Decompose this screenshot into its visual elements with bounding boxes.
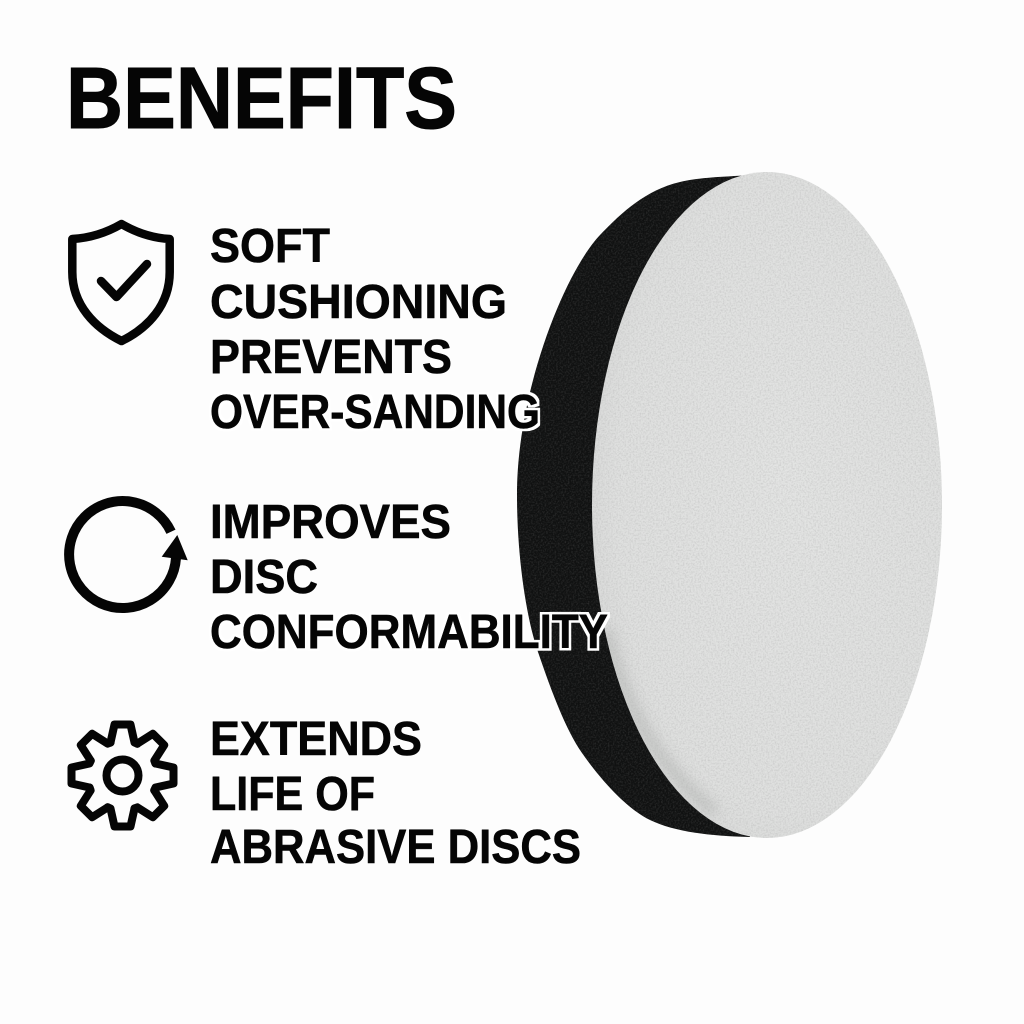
text block: benefit three: EXTENDS bbox=[210, 713, 422, 766]
text block: benefit one: SOFT bbox=[210, 220, 330, 273]
pad black foam side bbox=[517, 176, 800, 837]
text block: benefit one: OVER-SANDING bbox=[210, 386, 540, 439]
text block: benefit two: IMPROVES bbox=[210, 496, 451, 549]
text block: benefit three: LIFE OF bbox=[210, 768, 375, 821]
text block: benefit one: CUSHIONING bbox=[210, 276, 507, 329]
text block: benefit two: DISC bbox=[210, 551, 318, 604]
title: BENEFITS bbox=[66, 50, 457, 147]
icon: shield with check bbox=[72, 224, 170, 341]
icon: circular arrow bbox=[69, 501, 188, 608]
text block: benefit three: ABRASIVE DISCS bbox=[210, 821, 581, 874]
pad black foam texture bbox=[517, 176, 800, 837]
pad foam texture bbox=[592, 172, 942, 838]
text block: benefit one bbox=[210, 220, 540, 439]
icon: gear bbox=[72, 724, 174, 826]
product: foam interface pad bbox=[517, 172, 942, 838]
text block: benefit three bbox=[210, 713, 581, 874]
text block: benefit two bbox=[210, 496, 608, 659]
text block: benefit two: CONFORMABILITY bbox=[210, 606, 608, 659]
text block: benefit one: PREVENTS bbox=[210, 331, 452, 384]
pad white foam face bbox=[592, 172, 942, 838]
pad edge shading bbox=[606, 630, 715, 812]
